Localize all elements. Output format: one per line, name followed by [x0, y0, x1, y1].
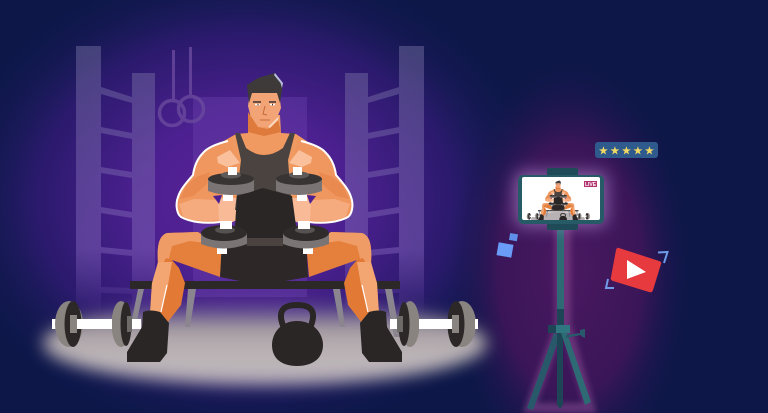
- pole: [557, 229, 564, 311]
- left dumbbell bottom: [201, 221, 247, 254]
- head: [247, 73, 283, 136]
- floor glow: [43, 301, 487, 385]
- left dumbbell top: [208, 167, 254, 201]
- right wall bars: [345, 46, 424, 316]
- decorative blue squares: [496, 233, 518, 258]
- corner brackets: [658, 252, 668, 263]
- wall bars and gym rings: [76, 46, 424, 316]
- kettlebell: [272, 305, 323, 366]
- hair: [247, 73, 283, 103]
- biceps shadow: [180, 172, 210, 199]
- neck and shoulders: [208, 115, 320, 205]
- bar segments: [77, 319, 478, 329]
- left leg: [127, 232, 222, 362]
- phone body: [518, 175, 604, 224]
- tank top: [235, 133, 295, 210]
- arm outline: [177, 141, 228, 223]
- screen content: mini athlete: [526, 180, 590, 220]
- tripod stand: [527, 225, 591, 410]
- thigh: [158, 232, 222, 277]
- shoe: [127, 310, 169, 362]
- right arm: [289, 140, 352, 224]
- center wall panel: [193, 97, 307, 297]
- legs: [527, 333, 560, 410]
- shorts: [220, 240, 308, 281]
- rating badge with five stars: ★★★★★: [598, 144, 656, 158]
- top clamp: [547, 168, 578, 177]
- barbell: [52, 301, 478, 347]
- left plates: [55, 301, 132, 347]
- face: [248, 92, 281, 127]
- bench: [130, 281, 400, 337]
- hub and knob: [548, 325, 570, 333]
- phone on mount: [518, 168, 604, 230]
- belly shadow: [235, 188, 296, 240]
- video play icon: [606, 248, 668, 292]
- live badge: LIVE: [585, 182, 597, 188]
- red play tile: [611, 248, 661, 292]
- gym rings: [160, 47, 204, 126]
- right plates: [397, 301, 476, 347]
- eyes and brows: [253, 101, 276, 103]
- right leg: [307, 232, 402, 362]
- screen: [522, 177, 600, 220]
- hand: [218, 198, 237, 224]
- forearm: [179, 199, 220, 221]
- left arm: [177, 140, 240, 224]
- shoulder highlight: [217, 150, 240, 167]
- tripod glow: [530, 225, 590, 408]
- phone glow: [514, 171, 608, 227]
- right dumbbell top: [276, 167, 322, 201]
- shin: [150, 258, 185, 323]
- gap between arm and dumbbell: [213, 195, 222, 204]
- right dumbbell bottom: [283, 221, 329, 254]
- full scene: bench, barbell and athlete: [52, 73, 478, 366]
- left wall bars: [76, 46, 155, 316]
- athlete: [127, 73, 402, 362]
- bottom clamp: [547, 222, 578, 230]
- arm fill: [177, 140, 236, 222]
- play triangle: [627, 260, 646, 279]
